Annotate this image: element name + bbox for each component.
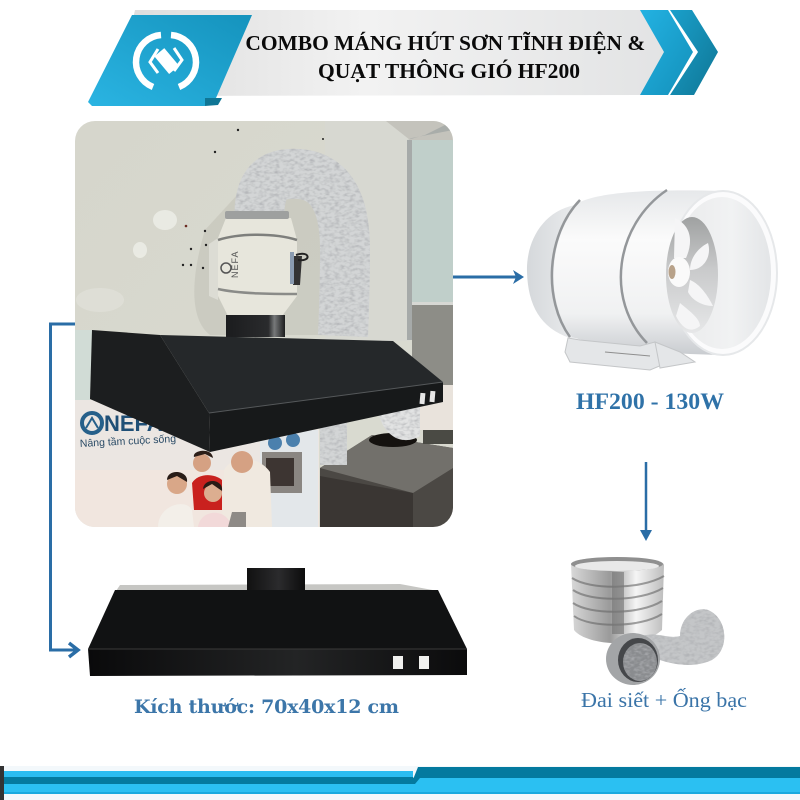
poster bbox=[75, 400, 319, 527]
fan body bbox=[553, 190, 723, 355]
wall marks bbox=[182, 129, 324, 269]
hood switch two bbox=[419, 656, 429, 669]
chevron two bbox=[670, 10, 718, 95]
arrow: fan to accessories bbox=[640, 462, 652, 541]
hood switch one bbox=[393, 656, 403, 669]
fan brand label: NEFA bbox=[230, 250, 240, 278]
hood silver top bbox=[116, 584, 438, 591]
hood switches bbox=[419, 393, 425, 404]
hood size label: Kích thước: 70x40x12 cm bbox=[134, 696, 399, 718]
arrow: photo to hood bbox=[50, 324, 78, 657]
inline fan on wall bbox=[209, 211, 308, 316]
right wall section bbox=[386, 121, 453, 385]
fan model label: HF200 - 130W bbox=[576, 389, 724, 415]
hood exhaust collar bbox=[247, 568, 305, 592]
fan metal bands bbox=[552, 190, 667, 343]
wall shadow bbox=[194, 196, 320, 335]
fan motor opening bbox=[666, 217, 718, 333]
duct below hood bbox=[320, 385, 453, 465]
footer band bbox=[0, 766, 800, 800]
fan blades bbox=[668, 218, 713, 330]
hood product image bbox=[88, 568, 467, 676]
family figures bbox=[158, 451, 272, 527]
wall bbox=[75, 121, 453, 527]
title: COMBO MÁNG HÚT SƠN TĨNH ĐIỆN & bbox=[245, 31, 645, 55]
silver flexible duct bbox=[259, 174, 345, 336]
black hood in photo bbox=[90, 330, 443, 452]
fan front opening bbox=[669, 191, 777, 355]
fan rear collar bbox=[527, 205, 600, 340]
logo tab bbox=[88, 15, 252, 106]
steel table bbox=[320, 433, 453, 527]
wall reflections bbox=[76, 210, 177, 312]
silver hose bbox=[606, 609, 724, 685]
poster slogan: Nâng tầm cuộc sống bbox=[80, 433, 176, 450]
title: QUẠT THÔNG GIÓ HF200 bbox=[318, 59, 580, 83]
fan product image bbox=[527, 190, 777, 370]
chevron one bbox=[640, 10, 693, 95]
accessories image bbox=[571, 557, 724, 685]
black connecting pipe bbox=[226, 315, 285, 337]
hood front strip bbox=[88, 649, 467, 676]
fan inner cone bbox=[673, 197, 771, 349]
poster logo: NEFA bbox=[104, 411, 163, 436]
accessories label: Đai siết + Ống bạc bbox=[581, 688, 747, 712]
hood sloped top bbox=[88, 590, 467, 649]
header banner bbox=[88, 10, 718, 106]
metal clamps bbox=[571, 557, 664, 643]
photo: installed combo bbox=[75, 121, 453, 527]
fan mounting bracket bbox=[565, 338, 695, 370]
banner grey ribbon bbox=[115, 10, 672, 96]
icon: logo mark bbox=[136, 35, 196, 87]
badges bbox=[268, 436, 282, 450]
lower left wall bbox=[75, 330, 92, 400]
microwave bbox=[262, 452, 302, 493]
arrow: photo to fan bbox=[453, 270, 524, 284]
